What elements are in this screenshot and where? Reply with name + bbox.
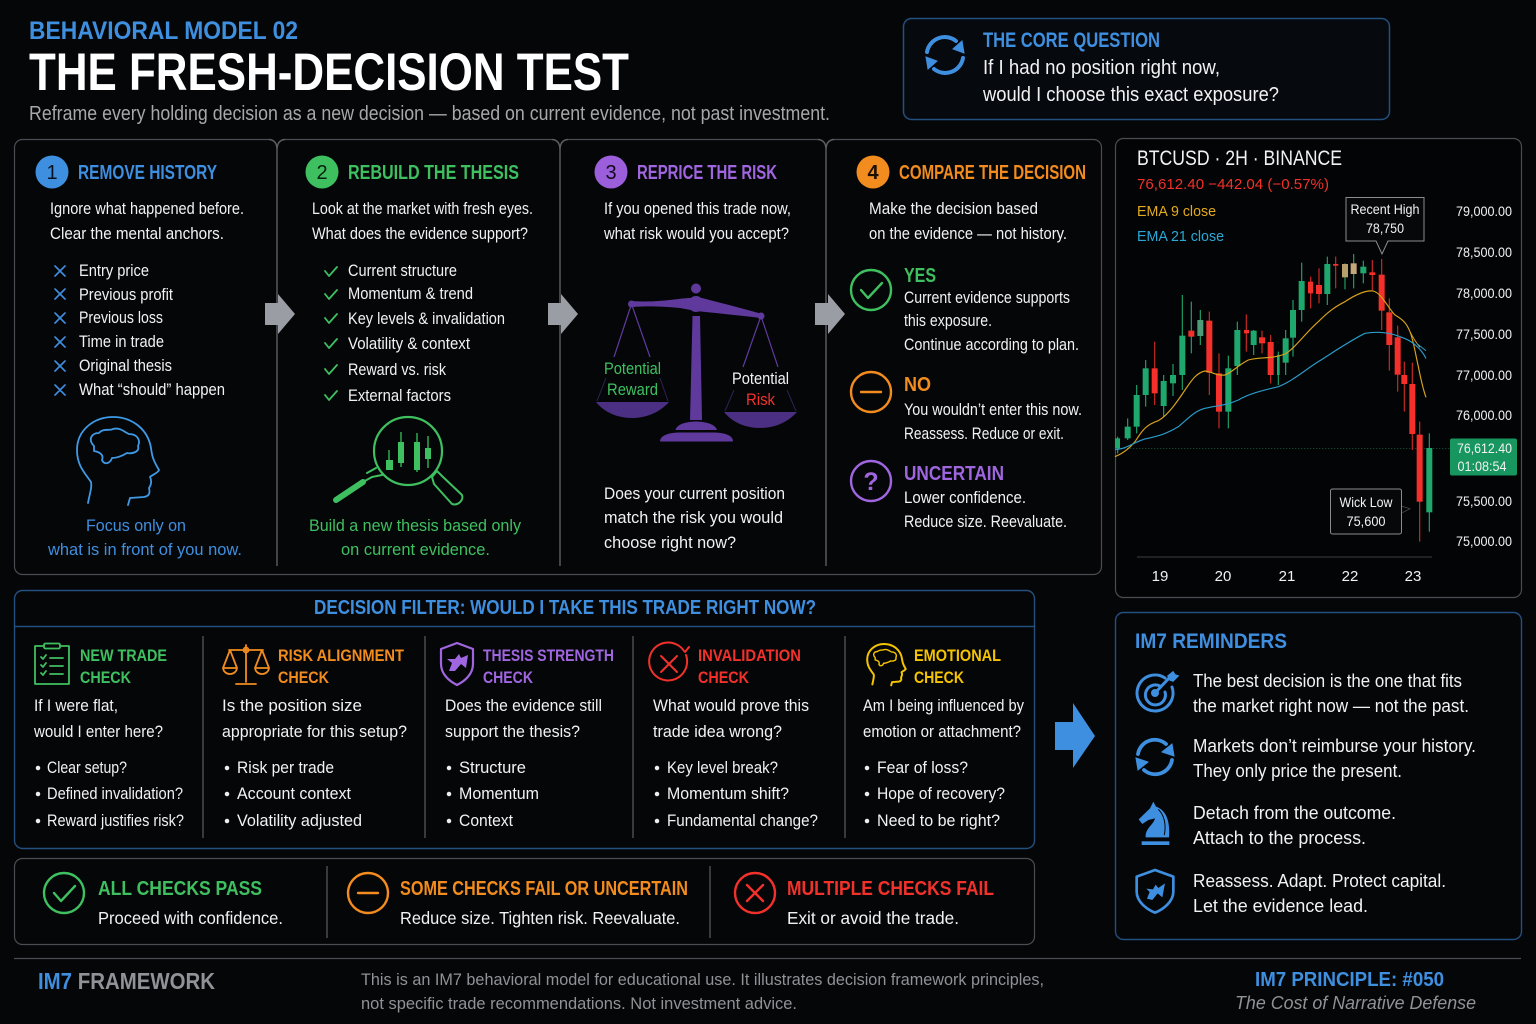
- icon: magnifier with candles: [336, 417, 462, 504]
- step 2: rebuild the thesis: Look at the market with fresh eyes.: [312, 199, 533, 218]
- reminders heading: IM7 REMINDERS: [1135, 630, 1287, 653]
- step 4: compare the decision: this exposure.: [904, 312, 992, 330]
- x axis: 23: [1405, 568, 1421, 585]
- callout: wick low: [1330, 489, 1402, 534]
- arrow: step 2 to 3: [548, 294, 578, 334]
- step 1: remove history: Entry price: [79, 262, 149, 280]
- reminder: detach: [1139, 802, 1396, 848]
- principle: IM7 PRINCIPLE: #050: [1255, 969, 1444, 991]
- icon: sync: [926, 37, 964, 73]
- footer: [14, 958, 1521, 1013]
- check: thesis strength: CHECK: [483, 668, 534, 687]
- step 1: remove history: Clear the mental anchors.: [50, 224, 224, 243]
- y axis labels: 78,000.00: [1456, 285, 1512, 301]
- step 4: compare the decision: on the evidence — not history.: [869, 224, 1067, 243]
- check: risk alignment: Volatility adjusted: [237, 812, 362, 830]
- check: emotional: [863, 644, 1024, 830]
- reminder: best decision: the market right now — not the past.: [1193, 695, 1469, 716]
- step 4: compare the decision: Continue according to plan.: [904, 336, 1079, 354]
- x axis: 22: [1342, 568, 1358, 585]
- check: invalidation: What would prove this: [653, 696, 809, 715]
- core question text: would I choose this exact exposure?: [982, 84, 1279, 106]
- reminder: detach: Detach from the outcome.: [1193, 802, 1396, 823]
- check: risk alignment: RISK ALIGNMENT: [278, 646, 405, 665]
- step 3: reprice the risk: Risk: [746, 391, 776, 409]
- step 4: compare the decision: 4: [867, 162, 879, 184]
- check: thesis strength: THESIS STRENGTH: [483, 646, 614, 665]
- check: thesis strength: support the thesis?: [445, 722, 580, 741]
- step 4: compare the decision: Current evidence supports: [904, 289, 1070, 307]
- icon: uncertain: ?: [863, 468, 879, 496]
- footer brand: IM7 FRAMEWORK: [38, 968, 215, 994]
- eyebrow: BEHAVIORAL MODEL 02: [29, 17, 298, 45]
- check: thesis strength: [441, 643, 614, 830]
- step 1: remove history: [36, 156, 244, 559]
- check: invalidation: [649, 642, 818, 830]
- disclaimer: This is an IM7 behavioral model for educational use. It illustrates decision framework principles,: [361, 970, 1044, 989]
- reminder: reassess: Let the evidence lead.: [1193, 895, 1368, 916]
- step 2: rebuild the thesis: What does the evidence support?: [312, 224, 528, 243]
- check: invalidation: Momentum shift?: [667, 785, 789, 803]
- step 1: remove history: 1: [46, 162, 58, 184]
- legend: [1137, 203, 1224, 245]
- step 1: remove history: Focus only on: [86, 516, 186, 535]
- check: new trade: would I enter here?: [33, 722, 163, 741]
- core question text: [982, 57, 1279, 106]
- title: THE FRESH-DECISION TEST: [29, 43, 629, 102]
- outcome: multiple fail: Exit or avoid the trade.: [787, 908, 959, 928]
- check: emotional: EMOTIONAL: [914, 646, 1001, 665]
- y axis labels: 79,000.00: [1456, 203, 1512, 219]
- y axis labels: 75,000.00: [1456, 533, 1512, 549]
- check: new trade: CHECK: [80, 668, 132, 687]
- step 2: rebuild the thesis: Build a new thesis based only: [309, 516, 521, 535]
- check: risk alignment: [222, 645, 407, 830]
- step 4: compare the decision: COMPARE THE DECISION: [899, 161, 1086, 184]
- core question heading: THE CORE QUESTION: [983, 29, 1160, 52]
- check: new trade: If I were flat,: [34, 696, 118, 715]
- reminder: best decision: [1137, 670, 1469, 716]
- disclaimer: not specific trade recommendations. Not investment advice.: [361, 994, 797, 1013]
- check: risk alignment: appropriate for this setup?: [222, 722, 407, 741]
- subtitle: Reframe every holding decision as a new decision — based on current evidence, not past investment.: [29, 103, 830, 125]
- y axis labels: 76,000.00: [1456, 407, 1512, 423]
- step 2: rebuild the thesis: Key levels & invalidation: [348, 310, 505, 328]
- y axis labels: 77,500.00: [1456, 326, 1512, 342]
- outcome: all pass: [44, 873, 283, 928]
- reminder: reassess: [1137, 870, 1446, 916]
- check: emotional: emotion or attachment?: [863, 722, 1021, 741]
- step 3: reprice the risk: Potential: [604, 360, 661, 378]
- outcome: all pass: Proceed with confidence.: [98, 908, 283, 928]
- panel: four steps: [14, 137, 1102, 574]
- step 3: reprice the risk: Reward: [607, 381, 658, 399]
- icon: head outline: [77, 417, 159, 505]
- y axis labels: 78,500.00: [1456, 244, 1512, 260]
- reminder: markets: [1136, 735, 1476, 781]
- step 4: compare the decision: Reassess. Reduce or exit.: [904, 425, 1064, 443]
- check: emotional: Need to be right?: [877, 812, 1000, 830]
- callout: wick low: 75,600: [1346, 513, 1386, 529]
- arrow: step 3 to 4: [815, 294, 845, 334]
- reminder: reassess: Reassess. Adapt. Protect capital.: [1193, 870, 1446, 891]
- step 1: remove history: REMOVE HISTORY: [78, 161, 217, 184]
- step 4: compare the decision: Make the decision based: [869, 199, 1038, 218]
- callout: recent high: Recent High: [1350, 201, 1420, 217]
- step 4: compare the decision: UNCERTAIN: [904, 463, 1004, 485]
- y axis labels: [1456, 203, 1512, 549]
- icon: no: [851, 372, 891, 412]
- step 3: reprice the risk: Does your current position: [604, 484, 785, 503]
- decision filter heading: DECISION FILTER: WOULD I TAKE THIS TRADE RIGHT NOW?: [314, 597, 816, 619]
- legend: EMA 21 close: [1137, 228, 1224, 245]
- x axis: 21: [1279, 568, 1295, 585]
- principle: The Cost of Narrative Defense: [1235, 993, 1476, 1013]
- step 2: rebuild the thesis: Current structure: [348, 262, 457, 280]
- arrow: step 1 to 2: [265, 294, 295, 334]
- step 4: compare the decision: [851, 156, 1086, 531]
- step 1: remove history: What “should” happen: [79, 381, 225, 399]
- chart title: BTCUSD · 2H · BINANCE: [1137, 147, 1342, 170]
- step 4: compare the decision: Reduce size. Reevaluate.: [904, 513, 1067, 531]
- arrow: to reminders: [1055, 703, 1095, 768]
- panel: reminders: [1116, 612, 1522, 940]
- check: new trade: Reward justifies risk?: [47, 812, 184, 830]
- reminder: markets: They only price the present.: [1193, 760, 1402, 781]
- check: risk alignment: CHECK: [278, 668, 330, 687]
- current price tag: 01:08:54: [1458, 458, 1507, 474]
- step 2: rebuild the thesis: External factors: [348, 387, 451, 405]
- step 3: reprice the risk: choose right now?: [604, 533, 736, 552]
- icon: balance scale: [596, 284, 797, 442]
- outcome: multiple fail: [735, 873, 994, 928]
- step 2: rebuild the thesis: 2: [316, 162, 328, 184]
- outcome: some fail: SOME CHECKS FAIL OR UNCERTAIN: [400, 878, 688, 900]
- step 4: compare the decision: Lower confidence.: [904, 489, 1026, 507]
- reminder: best decision: The best decision is the one that fits: [1193, 670, 1462, 691]
- step 1: remove history: Previous loss: [79, 309, 163, 327]
- check: new trade: [33, 644, 184, 830]
- y axis labels: 77,000.00: [1456, 367, 1512, 383]
- step 2: rebuild the thesis: Momentum & trend: [348, 285, 473, 303]
- chart price: 76,612.40 −442.04 (−0.57%): [1137, 176, 1329, 193]
- reminder: markets: Markets don’t reimburse your history.: [1193, 735, 1476, 756]
- candlesticks and EMA lines: [1115, 254, 1452, 542]
- step 2: rebuild the thesis: [306, 156, 533, 559]
- check: emotional: Am I being influenced by: [863, 696, 1024, 715]
- step 4: compare the decision: YES: [904, 265, 936, 287]
- step 3: reprice the risk: REPRICE THE RISK: [637, 161, 777, 184]
- check: new trade: Defined invalidation?: [47, 785, 183, 803]
- principle: [1235, 969, 1476, 1013]
- step 2: rebuild the thesis: on current evidence.: [341, 540, 490, 559]
- step 3: reprice the risk: If you opened this trade now,: [604, 199, 791, 218]
- step 1: remove history: Previous profit: [79, 286, 173, 304]
- check: risk alignment: Risk per trade: [237, 759, 334, 777]
- icon: uncertain: [851, 461, 891, 501]
- check: invalidation: INVALIDATION: [698, 646, 801, 665]
- outcome: multiple fail: MULTIPLE CHECKS FAIL: [787, 878, 994, 900]
- header: [29, 17, 830, 125]
- check: invalidation: Key level break?: [667, 759, 778, 777]
- check: thesis strength: Momentum: [459, 785, 539, 803]
- icon: yes: [851, 270, 891, 310]
- outcome: some fail: Reduce size. Tighten risk. Reevaluate.: [400, 908, 680, 928]
- check: emotional: Fear of loss?: [877, 759, 968, 777]
- panel: core question: [904, 18, 1390, 120]
- step 4: compare the decision: You wouldn’t enter this now.: [904, 401, 1082, 419]
- check: invalidation: trade idea wrong?: [653, 722, 782, 741]
- step 4: compare the decision: NO: [904, 374, 931, 396]
- legend: EMA 9 close: [1137, 203, 1216, 220]
- panel: price chart: [1115, 138, 1522, 598]
- disclaimer: [361, 970, 1044, 1013]
- step 2: rebuild the thesis: Reward vs. risk: [348, 361, 447, 379]
- current price tag: 76,612.40: [1457, 440, 1512, 456]
- core question text: If I had no position right now,: [983, 57, 1220, 79]
- outcome: all pass: ALL CHECKS PASS: [98, 878, 262, 900]
- panel: outcomes: [14, 858, 1034, 944]
- step 3: reprice the risk: 3: [605, 162, 617, 184]
- check: emotional: Hope of recovery?: [877, 785, 1005, 803]
- y axis labels: 75,500.00: [1456, 493, 1512, 509]
- check: thesis strength: Does the evidence still: [445, 696, 602, 715]
- step 3: reprice the risk: [594, 156, 797, 552]
- outcome: some fail: [348, 873, 688, 928]
- step 2: rebuild the thesis: REBUILD THE THESIS: [348, 161, 519, 184]
- callout: wick low: Wick Low: [1340, 494, 1393, 510]
- step 3: reprice the risk: match the risk you would: [604, 508, 783, 527]
- check: emotional: CHECK: [914, 668, 965, 687]
- x axis: 20: [1215, 568, 1231, 585]
- step 1: remove history: what is in front of you now.: [47, 540, 242, 559]
- x axis: [1137, 557, 1432, 585]
- check: new trade: NEW TRADE: [80, 646, 167, 665]
- step 1: remove history: Time in trade: [79, 333, 164, 351]
- step 3: reprice the risk: what risk would you accept?: [603, 224, 789, 243]
- callout: recent high: [1346, 198, 1424, 254]
- reminder: detach: Attach to the process.: [1193, 827, 1366, 848]
- check: risk alignment: Is the position size: [222, 696, 362, 715]
- panel: decision filter: [14, 590, 1034, 848]
- step 2: rebuild the thesis: Volatility & context: [348, 335, 470, 353]
- check: invalidation: CHECK: [698, 668, 750, 687]
- check: thesis strength: Context: [459, 812, 513, 830]
- step 1: remove history: Original thesis: [79, 357, 172, 375]
- check: risk alignment: Account context: [237, 785, 351, 803]
- x axis: 19: [1152, 568, 1168, 585]
- step 3: reprice the risk: Potential: [732, 370, 789, 388]
- check: new trade: Clear setup?: [47, 759, 127, 777]
- callout: recent high: 78,750: [1366, 220, 1404, 236]
- check: thesis strength: Structure: [459, 759, 526, 777]
- check: invalidation: Fundamental change?: [667, 812, 818, 830]
- current price tag: [1450, 438, 1517, 476]
- step 1: remove history: Ignore what happened before.: [50, 199, 244, 218]
